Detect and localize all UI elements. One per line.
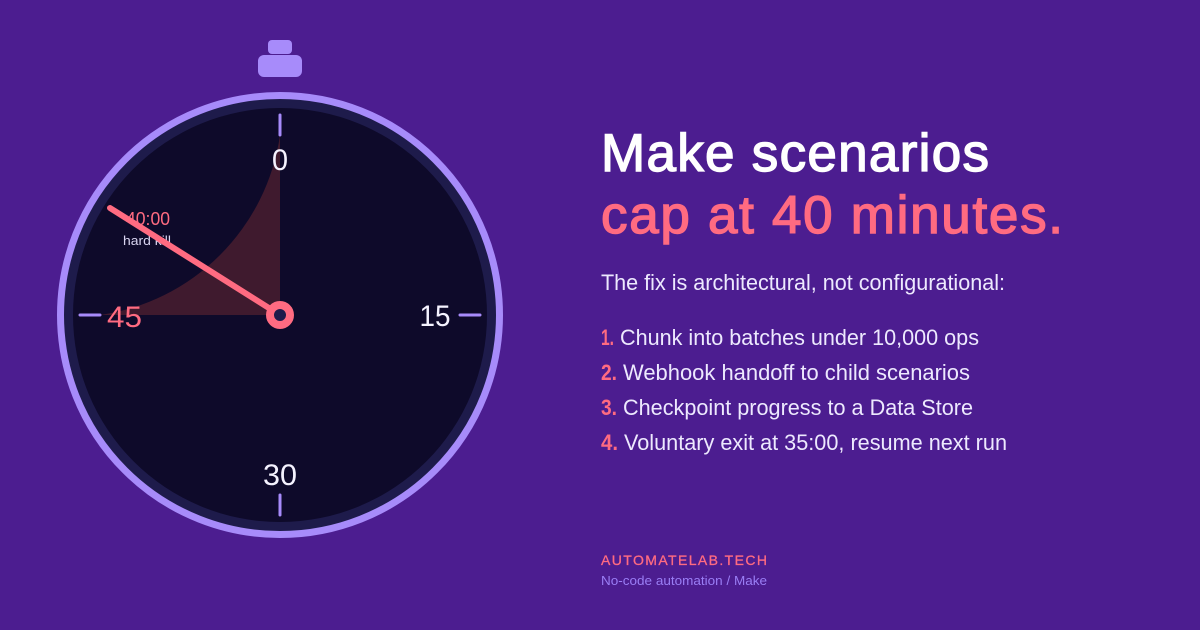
callout: 40:00: 40:00 [126,209,170,229]
stopwatch hand [110,208,280,315]
tick marks [80,115,480,515]
dial label 30: 30 [263,459,297,492]
list item 2: 2. [601,360,617,385]
stopwatch [60,40,500,534]
icon: stopwatch crown [258,40,302,77]
dial label 0: 0 [272,144,288,177]
list item 4: 4. [601,430,618,455]
intro text: The fix is architectural, not configurational: [601,270,1005,295]
hand pivot [270,305,290,325]
brand tagline: No-code automation / Make [601,573,767,588]
dial label 15: 15 [420,300,450,333]
list item 2: Webhook handoff to child scenarios [623,360,970,385]
numbered list [601,325,1007,455]
title: cap at 40 minutes. [601,186,1063,245]
callout: hard kill: hard kill [123,233,171,248]
list item 1: 1. [601,325,614,350]
dial label 45: 45 [107,301,142,334]
list item 4: Voluntary exit at 35:00, resume next run [624,430,1007,455]
list item 1: Chunk into batches under 10,000 ops [620,325,979,350]
title [601,124,1063,245]
elapsed sector [100,135,280,315]
list item 3: Checkpoint progress to a Data Store [623,395,973,420]
list item 3: 3. [601,395,617,420]
brand name: AUTOMATELAB.TECH [601,552,767,568]
stopwatch outer ring [60,96,500,534]
stopwatch dial face [73,108,487,522]
title: Make scenarios [601,124,989,183]
